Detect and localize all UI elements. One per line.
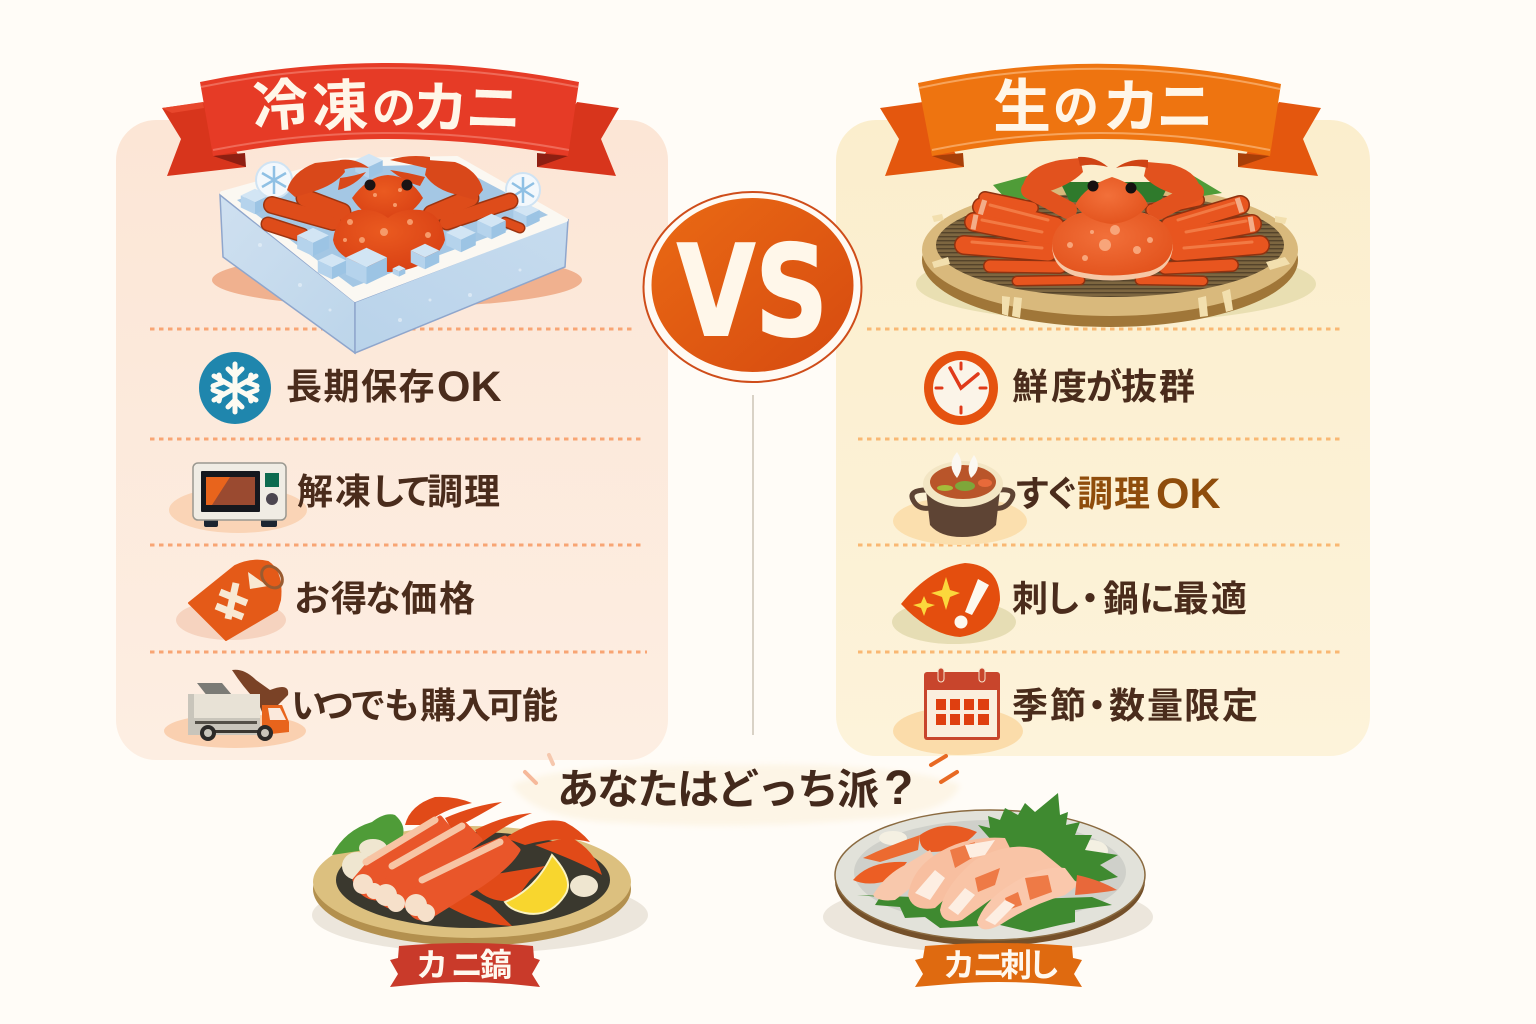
callout: which do you prefer	[512, 755, 960, 826]
label text: crab sashimi: カニ刺し	[943, 940, 1060, 986]
crab: claws	[1023, 158, 1200, 197]
panel: fresh crab	[836, 120, 1370, 756]
row: excellent freshness	[924, 351, 1195, 425]
title text: fresh crab: 生	[993, 60, 1051, 144]
back claws and pieces	[405, 797, 602, 926]
icon: price tag	[176, 561, 287, 640]
orange patches	[950, 842, 1052, 910]
white garnish	[879, 831, 1108, 923]
text: long-term storage OK: OK	[437, 363, 502, 411]
row: long-term storage	[199, 352, 502, 424]
crab: shell	[333, 175, 445, 272]
label: crab-leg dish	[390, 940, 540, 987]
leaves	[332, 814, 404, 855]
crab: eyes	[1088, 180, 1136, 194]
crab leg meat	[355, 818, 518, 918]
text: good price: お得な価格	[294, 570, 475, 622]
VS badge	[644, 192, 862, 382]
icon: delivery truck with plane	[164, 670, 306, 748]
pale meat highlights	[915, 840, 1015, 925]
title text: frozen crab: 凍	[311, 61, 370, 144]
icon: snowflake	[199, 352, 271, 424]
illustration: crab on bamboo tray	[916, 157, 1316, 327]
text: seasonal limited quantity: 季節・数量限定	[1012, 677, 1258, 729]
crab: claws	[287, 156, 483, 200]
icon: snowball right	[506, 173, 540, 207]
text: thaw and cook: 解凍して調理	[297, 463, 500, 515]
row: buy anytime	[164, 670, 558, 748]
text: cook right away OK: すぐ	[1014, 465, 1080, 517]
icon: snowball left	[256, 162, 292, 198]
label text: crab leg: カニ鎬	[416, 940, 512, 986]
shiso leaf top	[978, 793, 1118, 885]
title text: fresh crab: カ	[1102, 60, 1160, 144]
text: cook right away OK: 調理	[1077, 465, 1150, 517]
illustration: crab on ice in foam box	[212, 154, 582, 353]
row: cook right away	[893, 452, 1220, 545]
text: excellent freshness: 鮮度が抜群	[1012, 358, 1195, 410]
centre divider line	[752, 395, 754, 735]
VS text: VS	[677, 218, 828, 365]
banner: fresh crab title	[880, 60, 1321, 176]
text: buy anytime: いつでも購入可能	[291, 677, 558, 729]
row: seasonal limited quantity	[893, 668, 1258, 755]
pale mottled leg tops	[366, 820, 500, 880]
icon: calendar	[893, 668, 1023, 755]
dish: crab legs on bamboo plate	[312, 797, 648, 953]
title text: frozen crab: 冷	[250, 59, 311, 144]
callout text: ?	[884, 762, 913, 815]
lemon wedge	[505, 855, 568, 914]
leaves behind crab	[993, 175, 1222, 202]
crab: eyes	[364, 180, 412, 190]
icon: steaming pot	[893, 452, 1027, 545]
text: cook right away OK: OK	[1156, 470, 1220, 518]
banner: frozen crab title	[162, 59, 619, 176]
icon: sparkle exclamation drop	[892, 563, 1016, 644]
row: thaw and cook	[169, 463, 500, 533]
crab: legs	[268, 198, 520, 235]
icon: microwave	[169, 463, 307, 533]
row: good price	[176, 561, 475, 640]
panel: frozen crab	[116, 120, 668, 760]
crab: shell	[1052, 211, 1173, 280]
label: crab sashimi dish	[915, 940, 1082, 987]
leg tips	[353, 874, 435, 922]
crab: legs	[964, 190, 1260, 281]
tray bindings	[932, 214, 1290, 318]
title text: frozen crab: ニ	[464, 63, 523, 146]
icon: clock	[924, 351, 998, 425]
callout text: あなたはどっち派	[557, 756, 879, 817]
text: best for sashimi and hot pot: 刺し・鍋に最適	[1012, 570, 1247, 622]
title text: fresh crab: ニ	[1156, 60, 1214, 144]
crab: pincers	[1078, 157, 1148, 168]
dish: crab sashimi plate	[823, 793, 1153, 953]
sashimi pieces	[853, 826, 1117, 929]
title text: fresh crab: の	[1053, 71, 1099, 137]
text: long-term storage OK: 長期保存	[286, 358, 435, 410]
title text: frozen crab: の	[372, 72, 416, 136]
row: best for sashimi and hot pot	[892, 563, 1247, 644]
callout sparks	[525, 755, 957, 783]
shiso leaf bottom	[857, 895, 1112, 932]
title text: frozen crab: カ	[412, 63, 469, 145]
